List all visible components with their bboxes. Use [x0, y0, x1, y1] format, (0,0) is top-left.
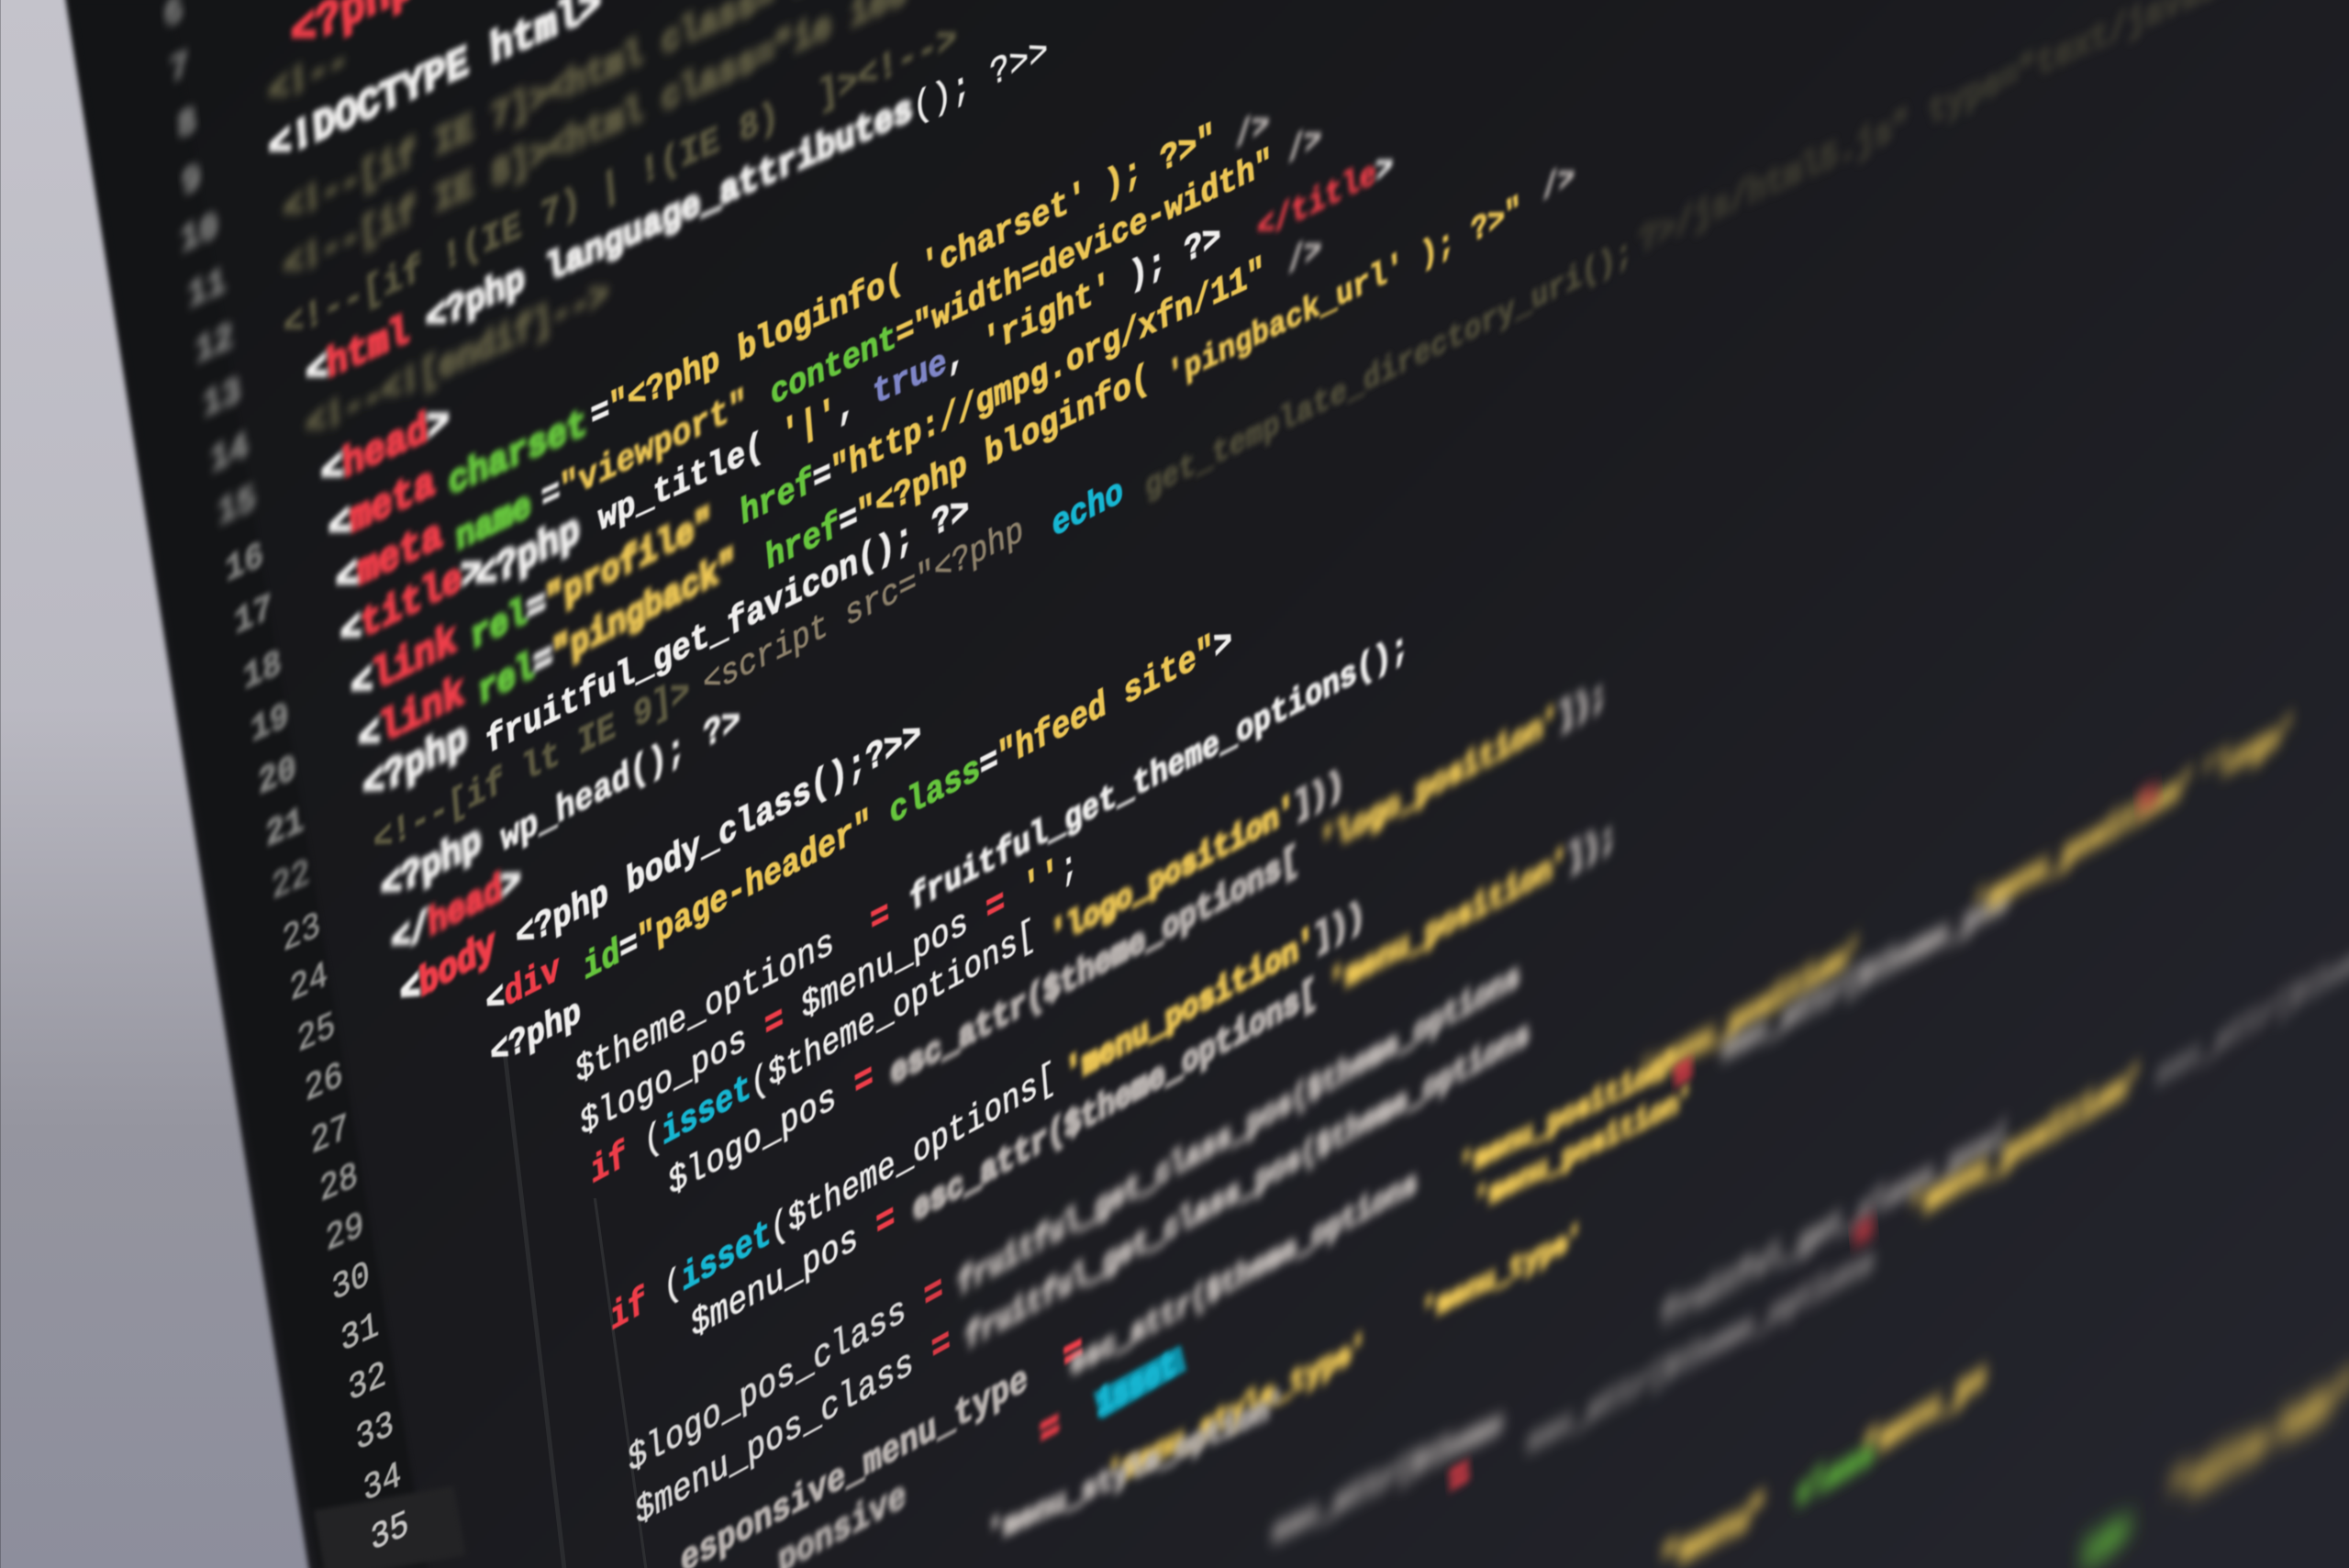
code: out of focus lines on the right: 'menu_style_type': [1107, 1329, 1368, 1496]
code: theme options assignment: [574, 626, 1410, 1095]
line number gutter: 27: [309, 1106, 351, 1164]
code: blurred lines at the bottom: "menu_po: [1863, 1357, 1987, 1471]
code: wp_head line: <?php: [379, 817, 484, 914]
code: meta charset line: ="<?php bloginfo( 'charset' ); ?>": [589, 118, 1218, 438]
code: logo_pos_class line: fruitful_get_class_pos($theme_options: [957, 958, 1521, 1304]
code: div page-header line: <div: [484, 947, 562, 1027]
code: responsive menu type line: [679, 1165, 1419, 1568]
line number gutter: 9: [181, 156, 203, 206]
line number gutter: 13: [201, 370, 243, 428]
code: link pingback line: <link: [357, 668, 466, 766]
code: out of focus lines on the right: 'menu_position': [1972, 762, 2197, 926]
code: meta charset line: [327, 105, 1271, 555]
code: isset logo position: 'logo_position'])): [1050, 764, 1345, 957]
code: logo_pos_class line: $logo_pos_class =: [627, 1268, 945, 1485]
code: out of focus lines on the right: =: [2136, 771, 2161, 829]
code: php open tag: <?php: [489, 991, 583, 1078]
code: esc_attr logo position: $logo_pos =: [667, 1055, 875, 1207]
code: out of focus lines on the right: 'menu_position': [1908, 1059, 2144, 1231]
line number gutter: 28: [318, 1154, 360, 1212]
code: meta viewport line: />: [1286, 118, 1323, 172]
code: link profile line: href="http://gmpg.org/xfn/11": [740, 251, 1267, 536]
code: favicon line: <?php: [362, 714, 470, 815]
code: meta viewport line: ="viewport": [540, 383, 749, 520]
code: out of focus lines on the right: 'menu_position': [1638, 932, 1863, 1095]
code: out of focus lines on the right: esc_attr($theme_pos: [1720, 883, 2009, 1070]
code: body tag line: <?php body_class();?>>: [514, 712, 923, 961]
code: meta charset line: />: [1233, 105, 1271, 157]
line number gutter: 14: [209, 425, 250, 483]
line number gutter: 23: [281, 904, 322, 962]
line number gutter: [162, 0, 410, 1562]
code: doctype and conditional comments: <!--[if !(IE 7) | !(IE 8) ]><!-->: [282, 17, 959, 350]
code: menu_pos_class line: $menu_pos_class =: [634, 1320, 952, 1537]
code: meta charset line: charset: [447, 402, 588, 506]
code: html5 script comment line: get_template_directory_uri();: [1143, 232, 1634, 507]
code: doctype and conditional comments: <!--: [267, 39, 350, 117]
code: link pingback line: 'pingback_url' ); ?>": [1166, 190, 1524, 396]
code: div page-header line: id="page-header" class="hfeed site">: [582, 619, 1234, 991]
code: link pingback line: [357, 159, 1576, 766]
code: esc_attr menu position: 'menu_position']);: [1328, 817, 1618, 1005]
line number gutter: 8: [176, 99, 198, 149]
code: logo and menu position: $logo_pos = $menu_pos = '';: [579, 841, 1080, 1147]
line number gutter: 24: [288, 953, 329, 1012]
code: favicon line: fruitful_get_favicon(); ?>: [484, 487, 971, 764]
code: doctype and conditional comments: (); ?>>: [911, 28, 1050, 131]
code: menu_pos_class line: [634, 1016, 1531, 1537]
code: meta charset line: <meta: [327, 460, 437, 555]
code: html5 script comment line: <!--[if lt IE 9]>: [372, 670, 692, 865]
screen edge gutter: [72, 0, 427, 1568]
code: isset menu position: [608, 895, 1366, 1341]
line number gutter: 31: [340, 1304, 381, 1362]
code: wp_head line: [379, 697, 742, 914]
code: blurred lines at the bottom: esc_attr($theme_options: [1526, 1242, 1876, 1462]
code: out of focus lines on the right: 'logo': [2199, 710, 2299, 796]
line number gutter: 22: [270, 851, 312, 910]
line number gutter: 12: [194, 316, 235, 373]
code: responsive menu type line: =: [1039, 1404, 1062, 1458]
code: isset logo position: [589, 764, 1345, 1195]
code: blurred lines at the bottom: =: [1447, 1450, 1472, 1508]
code: doctype and conditional comments: <?php: [425, 258, 527, 345]
code: link profile line: />: [1286, 229, 1323, 283]
code: link profile line: <link: [350, 616, 459, 714]
code: out of focus lines on the right: fruitful_get_class_pos(: [1661, 1116, 2010, 1335]
code: title line: </title>: [1256, 145, 1395, 250]
code: esc_attr menu position: esc_attr($theme_options[: [911, 972, 1318, 1231]
code: out of focus lines on the right: [1107, 710, 2349, 1496]
code: title line: <title>: [339, 545, 484, 660]
code: title line: wp_title( '|', true, 'right' ); ?>: [597, 217, 1222, 541]
code: blurred lines at the bottom: class: [1795, 1433, 1876, 1516]
code: out of focus lines on the right: 'menu_position': [1459, 1047, 1679, 1185]
line number gutter: 17: [233, 586, 274, 645]
code: meta viewport line: [334, 118, 1323, 607]
line number gutter: 18: [241, 642, 284, 700]
code: html5 script comment line: echo: [1051, 472, 1125, 548]
line number gutter: 15: [217, 477, 258, 536]
code: esc_attr logo position: esc_attr($theme_options[: [889, 839, 1300, 1095]
code: meta viewport line: <meta: [334, 512, 444, 607]
code: out of focus lines on the right: =: [1672, 1048, 1695, 1103]
line number gutter: 10: [179, 205, 220, 263]
line number gutter: 26: [303, 1054, 345, 1112]
code: blurred lines at the bottom: esc_attr($theme: [1271, 1405, 1504, 1552]
line number gutter: 34: [362, 1453, 403, 1512]
code: closing head tag: </head>: [390, 857, 523, 965]
line number gutter: 16: [224, 534, 265, 593]
code: favicon line: [362, 487, 971, 815]
code: menu_pos_class line: fruitful_get_class_pos($theme_options: [964, 1016, 1531, 1357]
code: esc_attr logo position: [667, 676, 1608, 1207]
code: title line: <?php: [473, 506, 582, 606]
code: link pingback line: />: [1541, 159, 1576, 209]
code: blurred lines at the bottom: 'menu_style_option': [986, 1385, 1286, 1551]
code: esc_attr logo position: 'logo_position']);: [1319, 676, 1608, 864]
code: meta viewport line: name: [454, 484, 533, 561]
code: esc_attr menu position: $menu_pos =: [690, 1196, 896, 1350]
code: doctype and conditional comments: language_attributes: [544, 87, 915, 293]
code: logo_pos_class line: [627, 958, 1521, 1485]
code: title line: [339, 145, 1395, 660]
code: link pingback line: href="<?php bloginfo(: [764, 357, 1152, 581]
line number gutter: 32: [347, 1353, 388, 1411]
code: highlighted isset: isset: [1096, 1346, 1177, 1426]
code: esc_attr menu position: [690, 817, 1618, 1350]
code: out of focus lines on the right: =: [1852, 1206, 1876, 1263]
code: doctype and conditional comments: [267, 0, 1050, 449]
line number gutter: 7: [169, 44, 191, 94]
code: html5 script comment line: <script src="<?php: [702, 511, 1025, 706]
line number gutter: 35: [369, 1503, 410, 1562]
line number gutter: 30: [330, 1253, 372, 1311]
code: head tag: <head>: [319, 397, 451, 500]
code: doctype and conditional comments: <!--<![endif]-->: [305, 272, 610, 449]
code: meta viewport line: content="width=device-width": [769, 142, 1275, 416]
code: responsive menu type line: esc_attr($theme_options: [1069, 1165, 1419, 1385]
line number gutter: 20: [257, 747, 298, 805]
code: html5 script comment line: [372, 0, 2349, 865]
code: out of focus lines on the right: 'menu_type': [1421, 1220, 1584, 1330]
line number gutter: 11: [186, 261, 228, 318]
code: doctype and conditional comments: <html: [305, 308, 411, 398]
code: out of focus lines on the right: 'menu_position': [1474, 1081, 1695, 1219]
line number gutter: 29: [324, 1204, 365, 1262]
line number gutter: 25: [295, 1005, 337, 1062]
line number gutter: 21: [264, 799, 306, 858]
code: theme options assignment: fruitful_get_theme_options();: [908, 626, 1410, 921]
code: body tag line: [399, 712, 923, 1018]
code: link profile line: [350, 229, 1323, 714]
code: theme options assignment: $theme_options =: [574, 892, 891, 1095]
line number gutter: 33: [354, 1403, 395, 1461]
line number gutter: 19: [250, 695, 291, 752]
code: isset menu position: if (isset($theme_options[: [608, 1055, 1057, 1341]
code: link pingback line: rel="pingback": [477, 541, 739, 716]
code: body tag line: <body: [399, 923, 497, 1018]
code: wp_head line: wp_head(); ?>: [499, 697, 742, 862]
code: isset logo position: if (isset($theme_options[: [589, 912, 1037, 1195]
code: link profile line: rel="profile": [470, 500, 715, 660]
code: blurred lines at the bottom: [986, 1242, 2349, 1568]
code: isset menu position: 'menu_position'])): [1064, 895, 1366, 1095]
